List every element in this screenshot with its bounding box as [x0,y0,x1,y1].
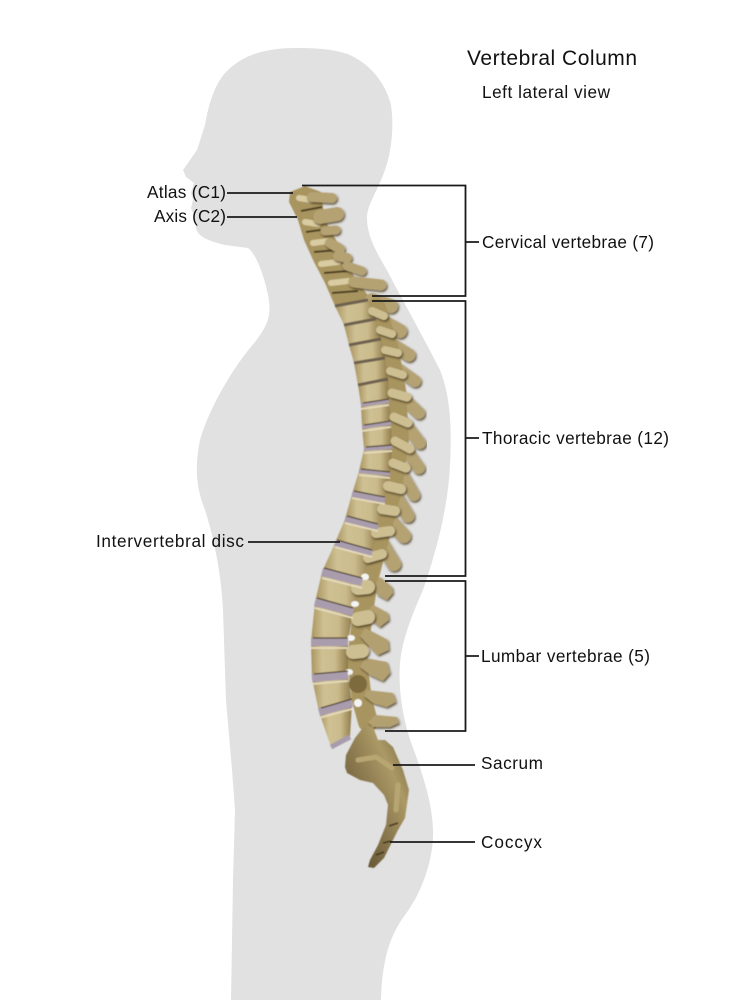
lumbar bracket [385,581,479,731]
label: intervertebral disc: Intervertebral disc [96,531,244,551]
body silhouette [183,48,451,1000]
label: thoracic: Thoracic vertebrae (12) [482,428,669,448]
disc edge shadows [313,399,392,708]
leader: coccyx [390,841,475,843]
subtitle: Left lateral view [482,82,611,102]
posterior column behind the bodies [357,308,399,722]
cervical bracket [302,186,479,296]
pedicles and articular processes [353,311,410,652]
vertebral rims [311,405,392,718]
leader: axis [227,216,297,218]
label: cervical: Cervical vertebrae (7) [482,232,654,252]
spine [289,186,420,868]
intervertebral discs [311,300,392,747]
callout lines and brackets [227,186,479,842]
gaps between the vertebral arches [345,574,369,707]
spinous processes, cervical and thoracic [312,197,420,564]
label: lumbar: Lumbar vertebrae (5) [481,646,650,666]
sacrum and coccyx [345,725,409,868]
label: atlas: Atlas (C1) [147,182,226,202]
vertebral bodies [311,300,392,747]
lumbar processes [360,577,399,727]
label: axis: Axis (C2) [154,206,226,226]
label: coccyx: Coccyx [481,832,542,852]
leader: sacrum [393,764,475,766]
L4 articular shadow [349,675,367,693]
title: Vertebral Column [467,47,637,70]
label: sacrum: Sacrum [481,753,543,773]
cervical vertebral bodies [289,186,372,306]
leader: intervertebral disc [248,541,340,543]
leader: atlas [227,192,293,194]
thoracic bracket [372,301,479,576]
